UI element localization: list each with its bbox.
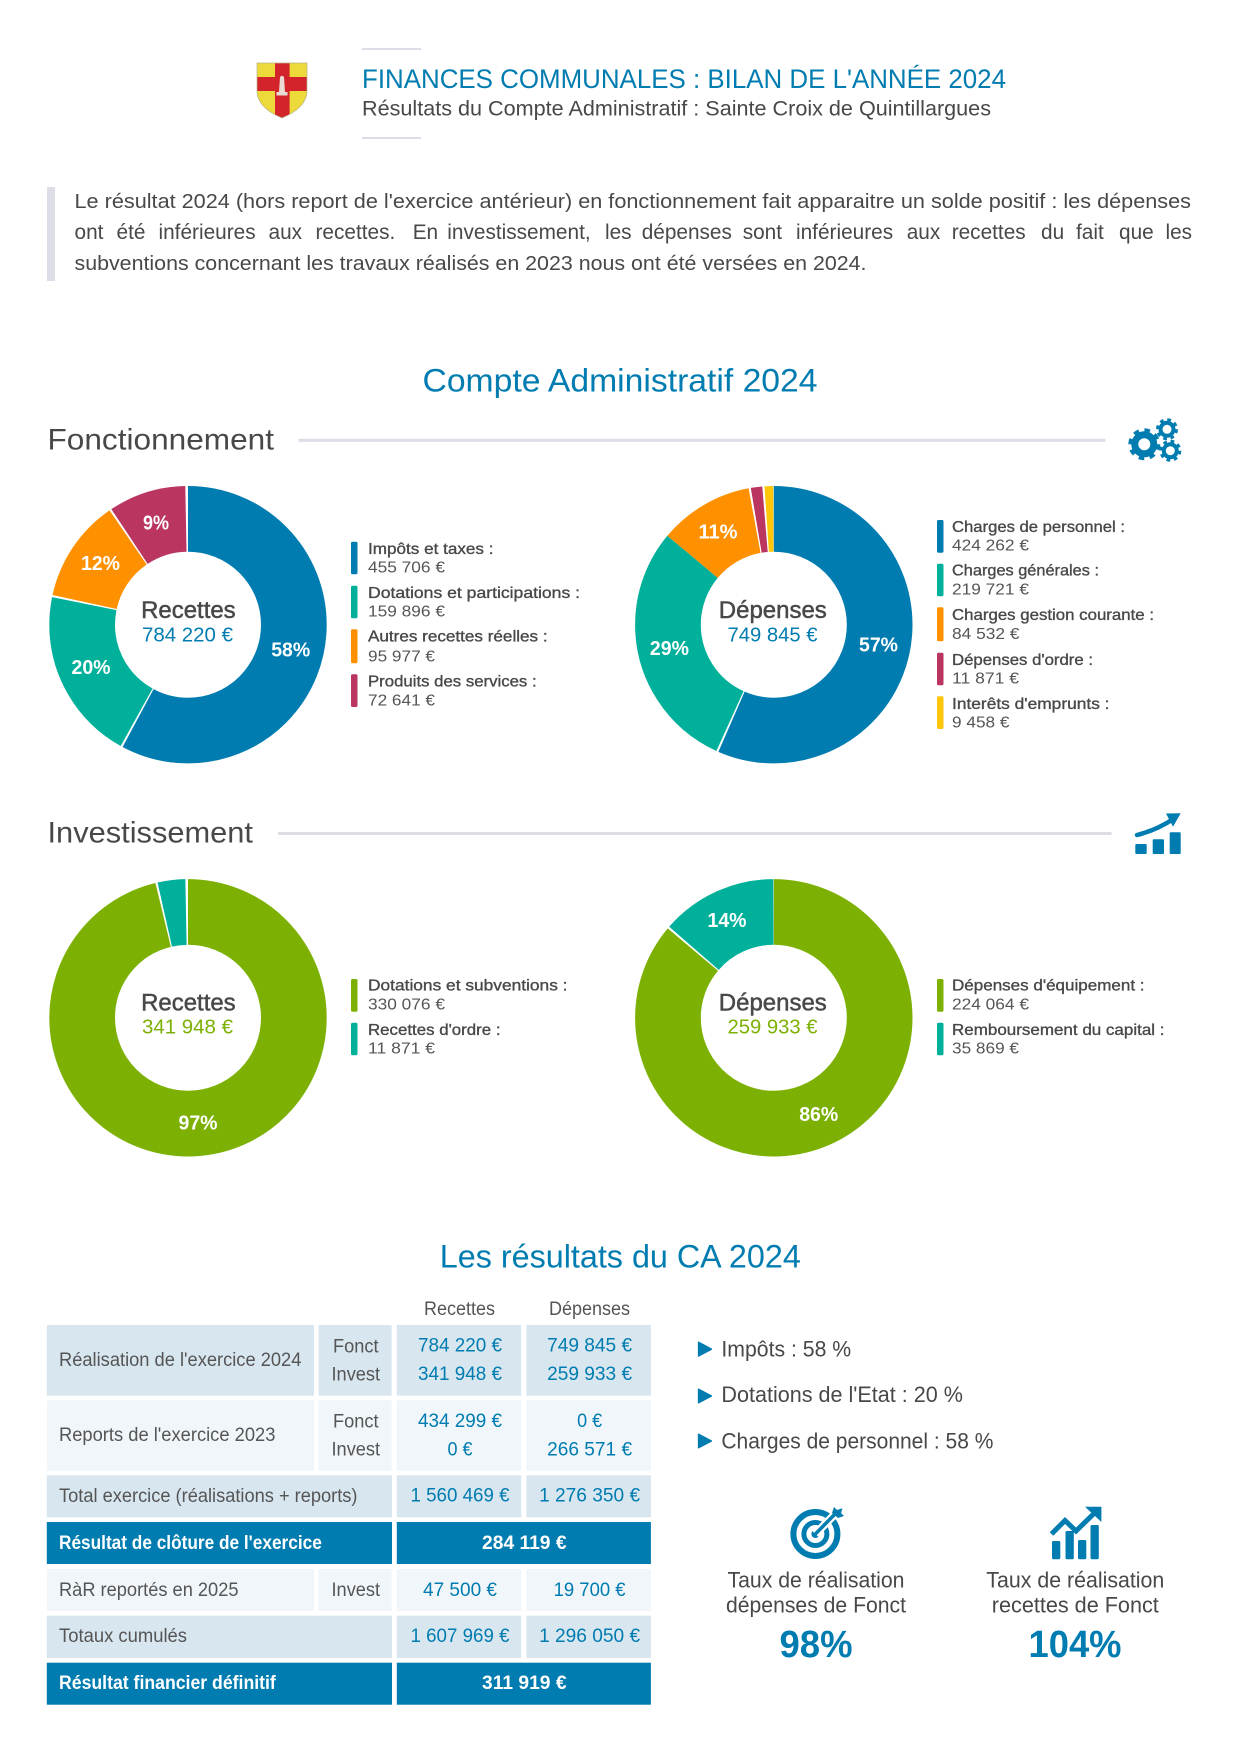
section: Fonctionnement [48,420,1180,460]
icon: rising bar chart [1135,813,1181,854]
legend: Dépenses fonctionnement: 11 871 € [952,670,1019,687]
intro text block: recettes [952,221,1026,244]
KPI: taux de réalisation dépenses: Taux de réalisation [728,1568,904,1593]
donut chart: Recettes fonctionnement: Recettes [141,597,236,624]
intro text block: été [116,221,145,244]
subtitle: Résultats du Compte Administratif : Sainte Croix de Quintillargues [362,98,991,120]
heading: Investissement: Investissement [48,816,254,849]
row: Totaux cumulés: 1 296 050 € [539,1626,641,1647]
legend: Recettes fonctionnement: 72 641 € [368,693,435,710]
row: Résultat de clôture: Résultat de clôture de l'exercice [59,1533,322,1554]
intro text block: fait [1076,221,1104,244]
row: RàR reportés en 2025: RàR reportés en 2025 [59,1580,238,1601]
intro text block: sont [743,221,782,244]
legend: Dépenses investissement: Remboursement du capital : [952,1022,1164,1039]
legend: Dépenses fonctionnement: 9 458 € [952,714,1010,731]
KPI: taux de réalisation recettes: 104% [1028,1624,1122,1666]
bullet list: Impôts : 58 % [721,1337,851,1362]
heading: Fonctionnement: Fonctionnement [48,423,275,456]
row: Réalisation de l'exercice 2024: 749 845 € [547,1336,633,1357]
donut chart: Dépenses fonctionnement: 29% [650,638,689,660]
legend: Dépenses fonctionnement: Charges générales : [952,563,1099,580]
row: Réalisation de l'exercice 2024: 259 933 € [547,1364,633,1385]
donut chart: Recettes fonctionnement: 20% [72,657,111,679]
row: Total exercice [47,1475,651,1517]
row: Total exercice: Total exercice (réalisations + reports) [59,1486,358,1507]
heading: Compte Administratif 2024: Compte Administratif 2024 [422,362,818,398]
icon: rising chart with arrow [1052,1507,1101,1559]
row: Total exercice: 1 560 469 € [410,1486,510,1507]
donut chart: Dépenses investissement: 86% [799,1104,838,1126]
intro text block: inférieures [796,221,893,244]
row: Réalisation de l'exercice 2024: Fonct [333,1336,379,1357]
legend: Dépenses fonctionnement: Interêts d'emprunts : [952,696,1110,713]
donut chart: Dépenses fonctionnement: 749 845 € [728,625,818,647]
donut chart: Dépenses fonctionnement: Dépenses [719,597,827,624]
donut chart: Recettes investissement [82,912,294,1134]
intro text block: dépenses [642,221,732,244]
intro text block: recettes. [316,221,395,244]
legend: Dépenses investissement: Dépenses d'équipement : [952,978,1144,995]
legend: Recettes fonctionnement: Produits des services : [368,674,537,691]
intro text block: subventions concernant les travaux réalisés en 2023 nous ont été versées en 2024. [74,253,866,275]
row: Résultat financier définitif: 311 919 € [482,1673,567,1694]
intro text block: investissement, [447,221,591,244]
row: Réalisation de l'exercice 2024: Invest [332,1365,381,1386]
KPI: taux de réalisation dépenses [726,1507,906,1666]
legend: Dépenses fonctionnement: 219 721 € [952,582,1029,599]
donut chart: Recettes investissement: Recettes [141,990,236,1017]
icon: gears [1130,420,1180,460]
donut chart: Recettes fonctionnement: 58% [271,640,310,662]
donut chart: Recettes fonctionnement: 12% [81,553,120,575]
KPI: taux de réalisation dépenses: dépenses de Fonct [726,1593,906,1618]
row: Réalisation de l'exercice 2024: 341 948 € [418,1364,502,1385]
donut chart: Dépenses fonctionnement [650,519,898,731]
intro text block: les [605,221,632,244]
donut chart: Dépenses fonctionnement: 11% [698,521,738,543]
KPI: taux de réalisation recettes: recettes de Fonct [992,1593,1159,1618]
legend: Dépenses fonctionnement: Charges gestion courante : [952,607,1154,624]
heading: Les résultats du CA 2024: Les résultats du CA 2024 [440,1238,801,1274]
legend: Recettes fonctionnement [351,541,580,710]
row: Reports de l'exercice 2023: 266 571 € [547,1439,633,1460]
donut chart: Dépenses investissement: 259 933 € [728,1016,818,1038]
row: Totaux cumulés: 1 607 969 € [410,1626,510,1647]
title: FINANCES COMMUNALES : BILAN DE L'ANNÉE 2024 [362,64,1006,94]
KPI: taux de réalisation dépenses: 98% [780,1624,852,1666]
donut chart: Recettes fonctionnement [72,512,310,731]
row: RàR reportés en 2025: 47 500 € [423,1580,497,1601]
legend: Dépenses investissement [937,978,1164,1057]
row: RàR reportés en 2025: Invest [332,1580,381,1601]
row: Reports de l'exercice 2023: Reports de l'exercice 2023 [59,1425,275,1446]
bullet list: Dotations de l'Etat : 20 % [721,1382,963,1407]
donut chart: Dépenses fonctionnement: 57% [859,635,898,657]
legend: Recettes investissement: Recettes d'ordre : [368,1022,500,1039]
intro text block: aux [907,221,941,244]
legend: Recettes investissement: 11 871 € [368,1040,435,1057]
bullet list: Charges de personnel : 58 % [721,1428,993,1453]
row: Reports de l'exercice 2023: Fonct [333,1411,379,1432]
legend: Dépenses fonctionnement: Dépenses d'ordre : [952,652,1093,669]
row: Réalisation de l'exercice 2024: 784 220 € [418,1336,502,1357]
table column headers [424,1299,630,1320]
row: Résultat financier définitif: Résultat financier définitif [59,1673,276,1694]
donut chart: Dépenses investissement: Dépenses [719,990,827,1017]
intro text block: aux [268,221,303,244]
legend: Dépenses fonctionnement [937,519,1154,731]
intro text block: ont [74,221,104,244]
intro text block [47,187,1192,281]
legend: Recettes fonctionnement: 159 896 € [368,604,445,621]
row: RàR reportés en 2025: 19 700 € [554,1580,626,1601]
legend: Recettes fonctionnement: 455 706 € [368,560,445,577]
row: Reports de l'exercice 2023: 0 € [577,1411,603,1432]
legend: Recettes investissement: Dotations et subventions : [368,978,568,995]
table column headers: Recettes [424,1299,495,1320]
donut chart: Recettes investissement: 97% [178,1112,218,1134]
header [257,48,1006,139]
donut chart: Recettes investissement: 341 948 € [142,1016,233,1038]
legend: Dépenses investissement: 224 064 € [952,996,1029,1013]
bullet list [699,1337,993,1453]
legend: Recettes fonctionnement: 95 977 € [368,649,435,666]
row: Résultat de clôture [47,1522,651,1564]
row: Reports de l'exercice 2023 [47,1400,651,1471]
legend: Recettes fonctionnement: Autres recettes réelles : [368,629,548,646]
icon: target [793,1507,844,1556]
icon: municipal crest [257,63,307,119]
row: Totaux cumulés [47,1616,651,1658]
row: Résultat de clôture: 284 119 € [482,1533,567,1554]
legend: Dépenses fonctionnement: 424 262 € [952,538,1029,555]
intro text block: les [1166,221,1192,244]
intro text block: du [1041,221,1064,244]
intro text block: Le résultat 2024 (hors report de l'exercice antérieur) en fonctionnement fait apparaitre un solde positif : les dépenses [74,191,1191,213]
row: RàR reportés en 2025 [47,1569,651,1611]
section: Investissement [48,813,1181,854]
donut chart: Recettes fonctionnement: 9% [143,512,169,534]
row: Reports de l'exercice 2023: 0 € [448,1439,473,1460]
donut chart: Recettes fonctionnement: 784 220 € [142,625,233,647]
row: Totaux cumulés: Totaux cumulés [59,1626,187,1647]
legend: Dépenses fonctionnement: Charges de personnel : [952,519,1125,536]
row: Réalisation de l'exercice 2024: Réalisation de l'exercice 2024 [59,1350,302,1371]
legend: Recettes fonctionnement: Impôts et taxes : [368,541,494,558]
intro text block: inférieures [158,221,256,244]
donut chart: Dépenses investissement [668,910,880,1126]
legend: Dépenses investissement: 35 869 € [952,1040,1019,1057]
donut chart: Dépenses investissement: 14% [708,910,747,932]
row: Total exercice: 1 276 350 € [539,1486,641,1507]
intro text block: que [1119,221,1154,244]
table: résultats du CA [47,1299,651,1705]
row: Réalisation de l'exercice 2024 [47,1325,651,1396]
legend: Dépenses fonctionnement: 84 532 € [952,626,1020,643]
row: Reports de l'exercice 2023: 434 299 € [418,1411,502,1432]
legend: Recettes investissement [351,978,568,1057]
row: Résultat financier définitif [47,1663,651,1705]
legend: Recettes fonctionnement: Dotations et participations : [368,585,580,602]
KPI: taux de réalisation recettes [986,1507,1164,1666]
row: Reports de l'exercice 2023: Invest [332,1440,381,1461]
KPI: taux de réalisation recettes: Taux de réalisation [986,1568,1164,1593]
legend: Recettes investissement: 330 076 € [368,996,445,1013]
intro text block: En [413,221,438,244]
table column headers: Dépenses [549,1299,630,1320]
